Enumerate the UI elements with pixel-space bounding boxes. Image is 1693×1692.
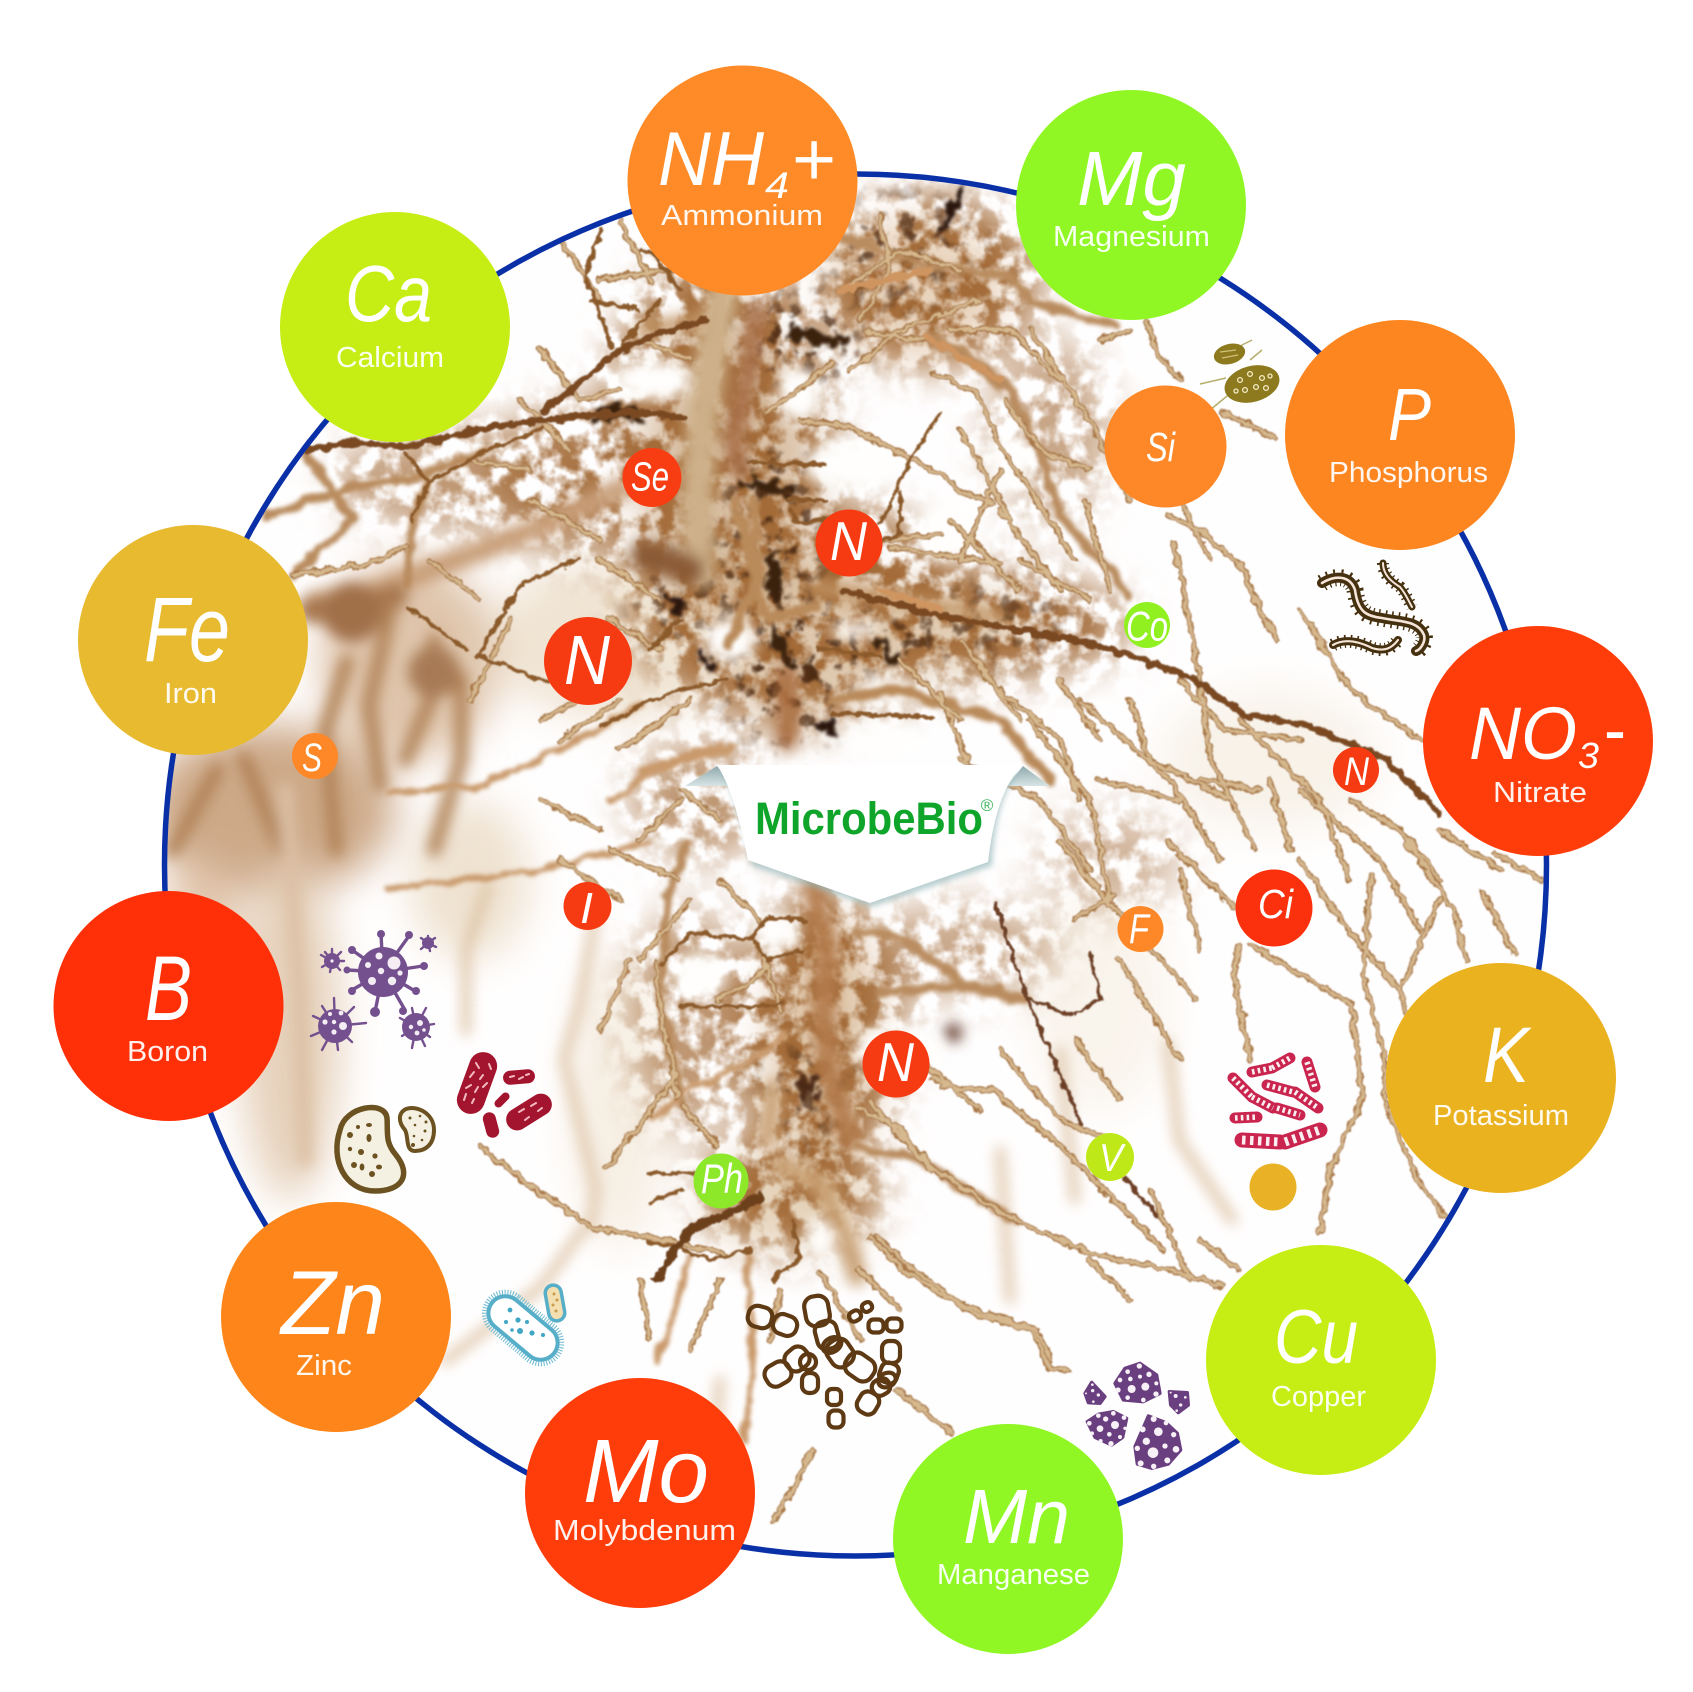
small node: Se [622, 448, 682, 507]
small node: V [1086, 1133, 1134, 1181]
small node: N (centre): N [830, 510, 867, 572]
small node: I: I [580, 884, 593, 933]
small dot: gold [1250, 1164, 1296, 1210]
node: Mg Magnesium: Mg [1077, 136, 1186, 222]
node: Ca Calcium [280, 212, 510, 442]
node: NO3- Nitrate: 3 [1578, 735, 1599, 776]
node: NH4+ Ammonium: Ammonium [661, 200, 823, 232]
small node: F [1118, 905, 1164, 952]
node: NH4+ Ammonium: 4 [765, 165, 789, 206]
icon: red rod bacteria [453, 1048, 556, 1139]
small node: N (lower): N [877, 1031, 914, 1093]
icon: bristled worms [1322, 563, 1424, 651]
small node: N (right) [1333, 747, 1379, 794]
node: Ca Calcium: Calcium [336, 342, 444, 374]
logo wordmark: MicrobeBio [755, 793, 983, 844]
small node: Ci: Ci [1258, 881, 1295, 927]
node: NH4+ Ammonium: + [791, 117, 835, 202]
small node: S [292, 733, 338, 780]
node: Ca Calcium: Ca [345, 249, 432, 338]
node: Mg Magnesium: Magnesium [1053, 221, 1210, 253]
node: B Boron: B [145, 938, 192, 1040]
node: Mn Manganese: Mn [963, 1474, 1070, 1560]
icon: olive protozoa [1200, 340, 1284, 410]
node: NH4+ Ammonium: NH [658, 117, 764, 202]
dense root texture masses [330, 195, 1180, 1250]
icon: crimson chain bacteria [1233, 1058, 1320, 1142]
small node: Ph [694, 1154, 748, 1208]
node: Mn Manganese: Manganese [937, 1559, 1090, 1591]
node: Mg Magnesium [1016, 90, 1246, 320]
small node: Si [1104, 386, 1226, 508]
node: Mo Molybdenum: Molybdenum [553, 1515, 736, 1547]
node: Fe Iron [78, 525, 308, 755]
node: Zn Zinc: Zn [279, 1253, 385, 1354]
icon: brown ring chains [746, 1294, 902, 1428]
node: Mn Manganese [893, 1424, 1123, 1654]
small node: I [564, 882, 612, 933]
small node: Ph: Ph [701, 1155, 743, 1202]
icon: purple coccus clusters [1085, 1363, 1188, 1469]
small node: F: F [1129, 905, 1151, 952]
node: Zn Zinc: Zinc [296, 1350, 352, 1382]
node: Cu Copper [1206, 1245, 1436, 1475]
node: B Boron: Boron [127, 1036, 208, 1068]
banner: MicrobeBio logo [685, 765, 1050, 907]
node: P Phosphorus [1285, 320, 1515, 550]
node: Zn Zinc [221, 1202, 451, 1432]
icon: blue bacillus [477, 1284, 569, 1371]
node: NO3- Nitrate [1423, 626, 1653, 856]
icon: brown bean-shaped cells [337, 1108, 434, 1191]
node: Cu Copper: Cu [1274, 1295, 1358, 1380]
node: B Boron [54, 891, 284, 1121]
small node: S: S [302, 736, 322, 780]
small node: N (right): N [1344, 750, 1369, 794]
outer blue ring [164, 174, 1546, 1556]
node: K Potassium [1386, 963, 1616, 1193]
registered mark: ® [981, 796, 994, 815]
small node: V: V [1099, 1137, 1127, 1180]
small node: Si: Si [1146, 424, 1176, 470]
node: NO3- Nitrate: Nitrate [1493, 777, 1587, 809]
node: K Potassium: K [1483, 1010, 1532, 1099]
small node: Co: Co [1126, 602, 1168, 650]
node: K Potassium: Potassium [1433, 1100, 1569, 1132]
node: Mo Molybdenum [525, 1378, 755, 1608]
small node: N (left) [544, 617, 632, 705]
small node: N (centre) [816, 510, 882, 576]
node: Mo Molybdenum: Mo [583, 1422, 709, 1522]
node: Fe Iron: Fe [144, 579, 230, 681]
node: Fe Iron: Iron [164, 678, 217, 710]
icon: purple virus cluster [311, 930, 436, 1050]
node: NO3- Nitrate: NO [1469, 692, 1577, 775]
node: P Phosphorus: Phosphorus [1329, 457, 1488, 489]
node: NO3- Nitrate: - [1604, 688, 1626, 771]
small node: Ci [1236, 870, 1312, 946]
small node: N (left): N [564, 621, 610, 699]
white gaps between roots [612, 360, 1032, 1262]
node: NH4+ Ammonium [628, 66, 858, 296]
small node: Se: Se [631, 454, 669, 500]
node: Cu Copper: Copper [1271, 1381, 1367, 1413]
root system photo area [145, 170, 1552, 1562]
small node: N (lower) [862, 1030, 930, 1098]
node: P Phosphorus: P [1388, 373, 1431, 456]
